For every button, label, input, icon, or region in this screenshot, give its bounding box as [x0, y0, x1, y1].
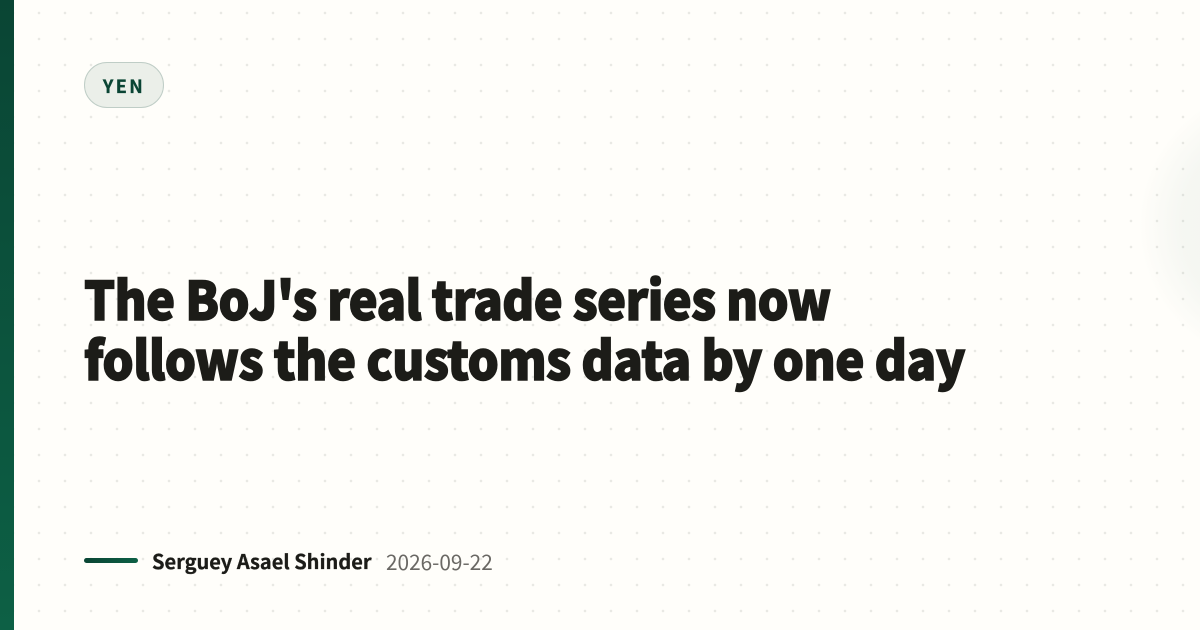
- title: [84, 260, 966, 396]
- byline rule: [84, 558, 138, 563]
- publication date: 2026-09-22: [386, 546, 493, 576]
- category tag: YEN: [84, 62, 164, 108]
- title: The BoJ's real trade series now: [84, 260, 831, 336]
- left accent bar: [0, 0, 14, 630]
- title: follows the customs data by one day: [84, 320, 965, 396]
- category tag: YEN: YEN: [103, 73, 145, 99]
- author name: Serguey Asael Shinder: [152, 546, 372, 575]
